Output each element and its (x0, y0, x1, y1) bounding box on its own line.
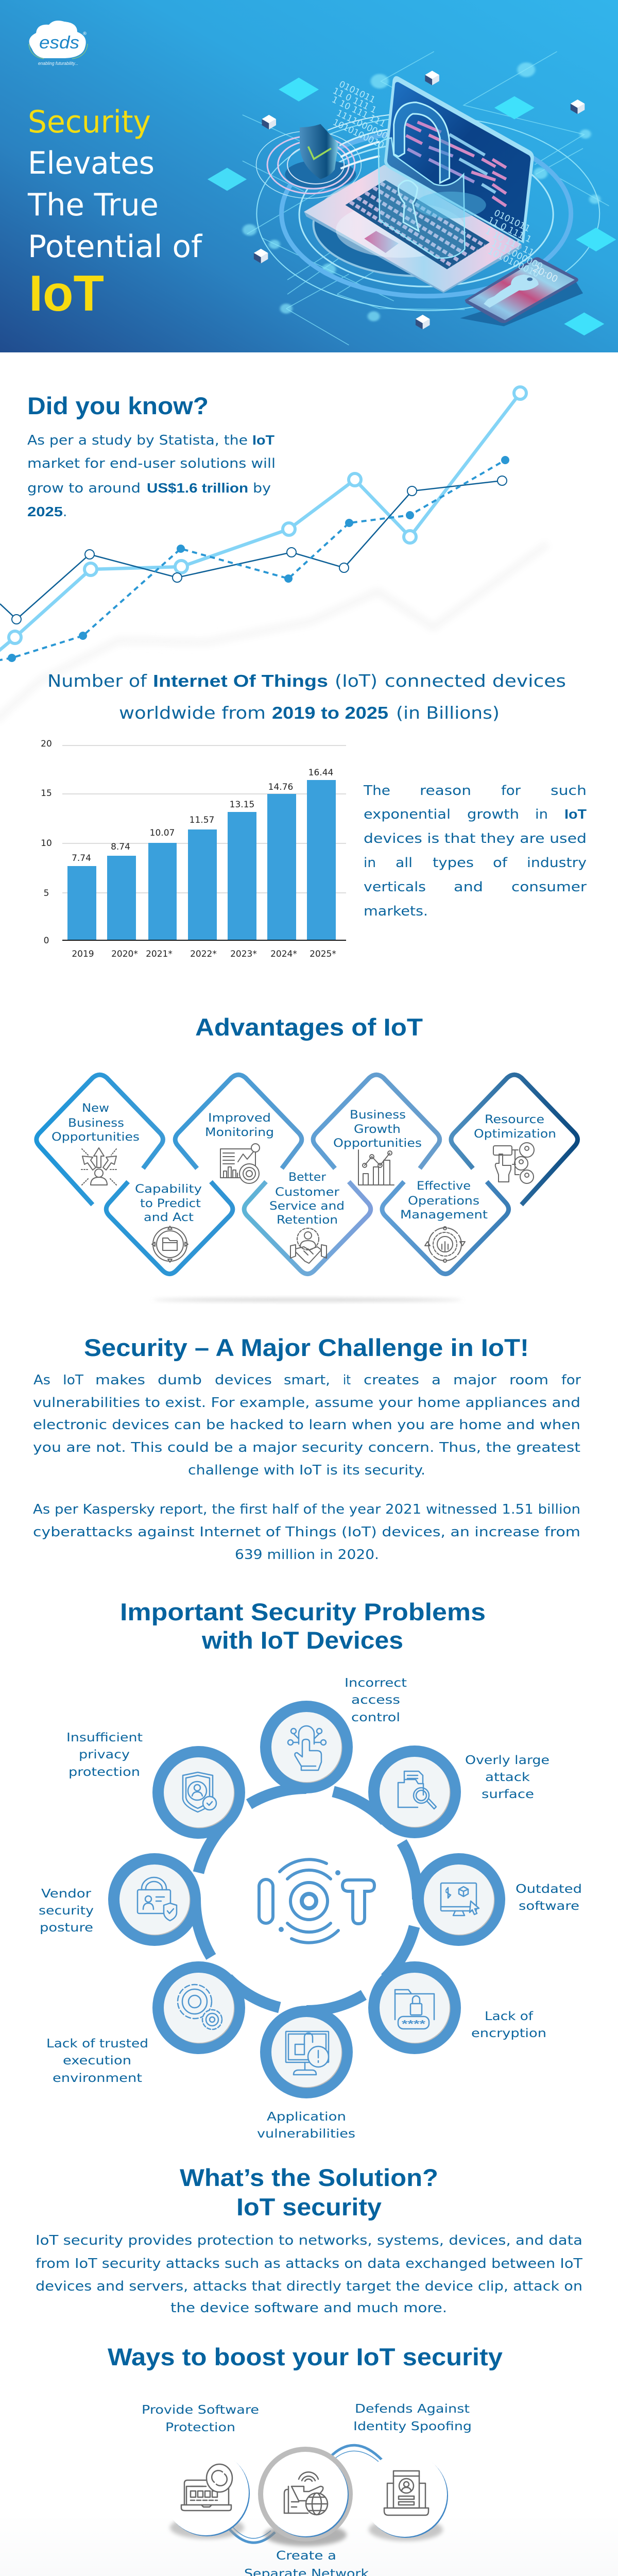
text: iot security paragraph: IoT security provides protection to networks, systems, devices, and data (36, 2233, 582, 2248)
laptop screen (384, 76, 534, 243)
label: incorrect access control: Incorrect (345, 1676, 407, 1690)
advantage: effective operations management: Effective (417, 1180, 471, 1193)
advantage: resource optimization: Resource (485, 1113, 544, 1126)
text: security challenge paragraph: major (453, 1372, 496, 1388)
node: lack of trusted execution environment (152, 1961, 245, 2054)
icon: laptop refresh (181, 2464, 232, 2511)
card: identity spoofing (363, 2452, 448, 2541)
text: statista study: As per a study by Statista, the (27, 433, 248, 448)
bar chart: devices by year (41, 739, 346, 959)
value labels: 14.76 (268, 782, 293, 792)
heading: what's the solution: What’s the Solution? (180, 2164, 438, 2191)
value labels: 7.74 (72, 853, 91, 863)
logo: esds (29, 21, 88, 66)
label: incorrect access control: control (351, 1711, 400, 1724)
text: kaspersky report: 639 million in 2020. (235, 1547, 379, 1563)
phone (460, 282, 583, 326)
text: reason for growth: in (364, 855, 376, 871)
text: security challenge paragraph: devices (215, 1372, 272, 1388)
advantage: better customer service and retention (269, 1171, 345, 1227)
node: insufficient privacy protection (152, 1746, 245, 1839)
advantage: improved monitoring: Improved (208, 1112, 271, 1125)
card: software protection (163, 2450, 250, 2539)
advantage: resource optimization (474, 1113, 556, 1141)
advantage: new business opportunities: Opportunities (52, 1131, 140, 1144)
heading: ways to boost: Ways to boost your IoT security (108, 2343, 503, 2370)
white cubes (254, 71, 585, 329)
dark thin line (0, 476, 507, 624)
hero title (27, 104, 203, 321)
advantage: effective operations management (400, 1180, 488, 1222)
hero title: Elevates (28, 145, 154, 181)
label: vendor security posture: posture (40, 1921, 93, 1935)
label: create a separate network (244, 2549, 369, 2576)
label: overly large attack surface: surface (482, 1788, 534, 1801)
y axis labels (41, 739, 52, 946)
label: vendor security posture (39, 1887, 94, 1935)
advantage: new business opportunities: New (82, 1102, 109, 1115)
dashed line (0, 456, 509, 662)
text: statista study: by (253, 481, 271, 496)
laptop base (304, 212, 522, 293)
label: vendor security posture: Vendor (41, 1887, 92, 1901)
label: provide software protection (142, 2403, 259, 2434)
binary digits: 1 10 111 11 (484, 226, 536, 259)
heading: number of connected devices: worldwide from (119, 703, 266, 723)
icon: folder in compass (152, 1226, 188, 1262)
text: security challenge paragraph: you are not. This could be a major security concern. Thus, the greatest (33, 1440, 580, 1455)
label: lack of encryption: encryption (471, 2027, 546, 2040)
text: reason for growth: verticals (364, 879, 426, 895)
icon: folder and magnifier (398, 1771, 436, 1809)
text: iot security paragraph: the device software and much more. (170, 2300, 447, 2316)
text: security challenge paragraph (33, 1372, 581, 1478)
node: application vulnerabilities (260, 2006, 353, 2098)
label: insufficient privacy protection: privacy (79, 1748, 130, 1761)
icon: gears (178, 1985, 222, 2029)
binary digits: 11 0 111 1 (486, 215, 533, 245)
text: reason for growth: industry (527, 855, 587, 871)
label: lack of encryption (471, 2010, 546, 2040)
node: incorrect access control (260, 1701, 353, 1793)
logo: esds: ® (82, 31, 87, 37)
heading: advantages of iot: Advantages of IoT (195, 1013, 423, 1041)
value labels: 8.74 (111, 842, 130, 852)
hero title: Potential of (28, 229, 203, 265)
advantage: new business opportunities (52, 1102, 140, 1144)
advantage: business growth opportunities: Opportunities (333, 1137, 422, 1150)
code lines (406, 122, 506, 206)
label: insufficient privacy protection (66, 1731, 143, 1779)
panel: advantages diamonds (37, 1075, 578, 1301)
text: security challenge paragraph: it (343, 1372, 351, 1388)
label: application vulnerabilities: vulnerabilities (257, 2127, 355, 2141)
binary digits: 11 0 111 1 (331, 86, 378, 116)
touchpad (364, 231, 399, 253)
text: security challenge paragraph: smart, (284, 1372, 330, 1388)
x axis labels: 2021* (146, 949, 173, 959)
advantage: better customer service and retention: Service and (269, 1200, 345, 1213)
text: reason for growth: consumer (511, 879, 587, 895)
icon: people gear handshake (290, 1228, 327, 1263)
decorative line chart (0, 387, 547, 721)
binary digits: 0101011 (492, 208, 532, 234)
light blue line (0, 387, 526, 653)
advantage: improved monitoring (205, 1112, 274, 1139)
binary digits: 1010100010 (331, 117, 386, 151)
text: iot security paragraph (36, 2233, 582, 2316)
node: outdated software (413, 1853, 505, 1946)
text: iot security paragraph: from IoT security attacks such as attacks on data exchanged between IoT (36, 2256, 582, 2272)
binary digits: 1111000000 (490, 239, 544, 272)
binary digits: 1010100010 (486, 246, 541, 280)
advantage: capability to predict and act: to Predict (140, 1197, 201, 1210)
text: reason for growth: of (493, 855, 508, 871)
y axis labels: 0 (44, 936, 49, 946)
value labels: 10.07 (150, 828, 175, 838)
glass padlock (379, 138, 465, 258)
y axis labels: 15 (41, 788, 52, 799)
label: lack of encryption: Lack of (485, 2010, 534, 2023)
connector arcs (228, 2445, 382, 2543)
text: security challenge paragraph: dumb (158, 1372, 202, 1388)
advantage: business growth opportunities (333, 1109, 422, 1150)
advantage: improved monitoring: Monitoring (205, 1126, 274, 1139)
label: lack of trusted execution environment (46, 2037, 148, 2085)
x axis labels: 2023* (230, 949, 257, 959)
advantage: effective operations management: Management (400, 1209, 488, 1222)
value labels: 11.57 (190, 815, 214, 825)
footer background with globe (0, 2514, 618, 2576)
floating diamonds (208, 78, 616, 335)
ring segments (171, 1765, 441, 2035)
label: overly large attack surface: Overly large (465, 1754, 550, 1767)
advantage: business growth opportunities: Business (350, 1109, 406, 1122)
glow points (243, 62, 600, 321)
advantage: better customer service and retention: Retention (277, 1214, 338, 1227)
label: provide software protection: Protection (165, 2421, 235, 2434)
text: statista study: IoT (252, 432, 274, 448)
label: outdated software: Outdated (516, 1883, 582, 1896)
text: statista study: grow to around (27, 481, 141, 496)
icon: shield with user (183, 1772, 216, 1812)
text: reason for growth: devices is that they are used (364, 831, 587, 846)
icon: folder lock (395, 1990, 434, 2029)
text: reason for growth: all (396, 855, 413, 871)
text: security challenge paragraph: makes (95, 1372, 145, 1388)
binary digits: 1111000000 (335, 108, 389, 142)
label: vendor security posture: security (39, 1904, 94, 1918)
label: application vulnerabilities (257, 2110, 355, 2141)
label: overly large attack surface: attack (485, 1771, 530, 1784)
central iot mark (259, 1859, 374, 1943)
text: reason for growth: The (363, 783, 390, 799)
circuit lines (243, 52, 609, 345)
text: reason for growth: IoT (564, 806, 587, 822)
bars (67, 780, 336, 940)
advantage: capability to predict and act (135, 1183, 202, 1224)
value labels: 13.15 (230, 800, 254, 810)
label: outdated software (516, 1883, 582, 1913)
text: statista study: 2025 (27, 504, 63, 519)
node: overly large attack surface (368, 1745, 461, 1838)
text: reason for growth: exponential (364, 807, 451, 822)
advantage: capability to predict and act: and Act (144, 1211, 194, 1224)
heading: important security problems: Important Security Problems (120, 1598, 486, 1625)
text: security challenge paragraph: electronic devices can be hacked to learn when you are home and when (33, 1417, 580, 1433)
hero title: The True (27, 187, 159, 223)
concentric rings (256, 117, 599, 311)
y axis labels: 20 (41, 739, 52, 749)
heading: security challenge: Security – A Major Challenge in IoT! (84, 1334, 529, 1361)
icon: dashboard and gauge (220, 1144, 260, 1183)
label: application vulnerabilities: Application (267, 2110, 346, 2124)
x axis labels: 2022* (190, 949, 217, 959)
text: security challenge paragraph: IoT (63, 1372, 83, 1388)
label: overly large attack surface (465, 1754, 550, 1801)
text: reason for growth: types (433, 855, 474, 871)
binary digits (330, 79, 544, 280)
text: iot security paragraph: devices and servers, attacks that directly target the device clip, attack on (36, 2279, 582, 2294)
text: statista study: market for end-user solutions will (27, 456, 276, 471)
value labels (72, 768, 333, 863)
text: security challenge paragraph: As (33, 1372, 50, 1388)
heading: number of connected devices: Internet Of Things (153, 671, 328, 690)
label: lack of trusted execution environment: execution (63, 2054, 131, 2067)
panel: ways to boost iot security (142, 2402, 472, 2576)
label: incorrect access control (345, 1676, 407, 1724)
text: security challenge paragraph: creates (364, 1372, 419, 1388)
hero title: Security (28, 104, 151, 140)
hero title: IoT (29, 265, 104, 321)
text: statista study: US$1.6 trillion (147, 480, 248, 496)
card: separate network (258, 2447, 353, 2546)
heading: did you know: Did you know? (27, 392, 209, 419)
heading: what's the solution: IoT security (236, 2193, 382, 2221)
node: vendor security posture (108, 1853, 201, 1946)
x axis labels: 2019 (72, 949, 94, 959)
text: kaspersky report: cyberattacks against Internet of Things (IoT) devices, an increase from (33, 1524, 580, 1540)
text: reason for growth: for (501, 783, 521, 799)
label: lack of trusted execution environment: Lack of trusted (46, 2037, 148, 2050)
label: incorrect access control: access (351, 1693, 400, 1707)
advantage: capability to predict and act: Capability (135, 1183, 202, 1196)
label: lack of trusted execution environment: environment (53, 2072, 142, 2085)
text: reason for growth: such (551, 783, 587, 799)
text: security challenge paragraph: a (432, 1372, 441, 1388)
text: security challenge paragraph: for (561, 1372, 581, 1388)
value labels: 16.44 (308, 768, 333, 778)
shield (300, 124, 338, 179)
label: defends against identity spoofing (353, 2402, 472, 2433)
label: create a separate network: Create a (276, 2549, 336, 2563)
text: security challenge paragraph: vulnerabilities to exist. For example, assume your home appliances and (33, 1395, 580, 1411)
label: defends against identity spoofing: Identity Spoofing (353, 2420, 472, 2433)
x axis labels (72, 949, 336, 959)
icon: hand and people (493, 1143, 534, 1183)
icon: monitor and cursor (441, 1883, 479, 1916)
text: kaspersky report: As per Kaspersky report, the first half of the year 2021 witnessed 1.51 billion (33, 1502, 580, 1517)
y axis labels: 10 (41, 838, 52, 849)
advantage: better customer service and retention: Customer (275, 1186, 340, 1199)
text: kaspersky report (33, 1502, 580, 1563)
heading: what's the solution (180, 2164, 438, 2221)
icon: lock id card (138, 1877, 177, 1921)
label: provide software protection: Provide Software (142, 2403, 259, 2417)
icon: monitor with lock and warning (286, 2031, 329, 2075)
text: statista study: . (63, 504, 67, 520)
heading: number of connected devices: 2019 to 2025 (272, 703, 388, 722)
text: reason for growth: reason (420, 783, 471, 799)
advantage: resource optimization: Optimization (474, 1128, 556, 1141)
keyboard (346, 180, 490, 269)
text: security challenge paragraph: room (509, 1372, 548, 1388)
diamond outlines (37, 1075, 578, 1274)
panel: hero banner (0, 0, 618, 352)
icon: gear and circuit (425, 1227, 465, 1262)
shield rings (256, 115, 389, 198)
icon: laptop with id (384, 2471, 428, 2515)
icon: arrows and person (81, 1148, 117, 1185)
phone clock: 20:00 (531, 263, 559, 285)
y axis labels: 5 (44, 888, 49, 899)
label: insufficient privacy protection: protection (68, 1766, 140, 1779)
illustration: secured laptop (208, 52, 616, 345)
text: reason for growth (363, 783, 587, 919)
advantage: new business opportunities: Business (68, 1117, 124, 1130)
x axis labels: 2024* (270, 949, 297, 959)
advantage: business growth opportunities: Growth (354, 1123, 401, 1136)
text: reason for growth: markets. (364, 904, 428, 919)
logo: esds: enabling futurability... (38, 61, 78, 66)
node: lack of encryption (368, 1961, 461, 2054)
hero background (0, 0, 618, 352)
text: reason for growth: growth (467, 807, 519, 822)
binary digits: 0101011 (337, 79, 377, 106)
heading: number of connected devices (47, 671, 566, 723)
heading: number of connected devices: Number of (47, 671, 148, 691)
advantage: effective operations management: Operations (408, 1195, 479, 1208)
label: defends against identity spoofing: Defends Against (355, 2402, 470, 2416)
text: statista study (27, 432, 276, 520)
icon: fingerprint hand (288, 1726, 326, 1770)
text: security challenge paragraph: challenge with IoT is its security. (188, 1463, 425, 1478)
label: outdated software: software (519, 1900, 579, 1913)
panel: security problems ring (39, 1676, 582, 2141)
blurred chart shadow (0, 544, 547, 721)
binary digits: 1 10 111 111 (330, 95, 387, 129)
heading: important security problems (120, 1598, 486, 1654)
x axis labels: 2025* (310, 949, 336, 959)
logo: esds: esds (39, 33, 79, 53)
shadow under diamonds (153, 1298, 462, 1301)
heading: number of connected devices: (in Billions) (396, 703, 500, 723)
icon: growth bars (358, 1150, 394, 1185)
icon: masked password: **** (402, 2019, 425, 2030)
text: reason for growth: and (454, 879, 483, 895)
heading: number of connected devices: (IoT) (335, 671, 377, 691)
label: insufficient privacy protection: Insufficient (66, 1731, 143, 1744)
icon: hand wifi globe (284, 2472, 328, 2515)
heading: number of connected devices: connected devices (385, 671, 566, 691)
heading: important security problems: with IoT Devices (201, 1626, 403, 1654)
text: reason for growth: in (535, 807, 548, 822)
advantage: better customer service and retention: Better (288, 1171, 327, 1184)
x axis labels: 2020* (111, 949, 138, 959)
